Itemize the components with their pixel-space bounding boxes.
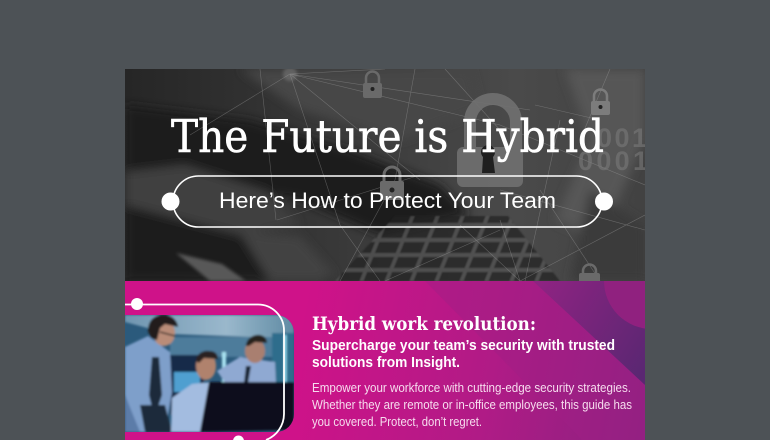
panel subheading <box>312 338 615 371</box>
corner circle <box>604 281 645 328</box>
icon: large padlock <box>457 99 523 187</box>
panel subheading: Supercharge your team’s security with trusted <box>312 338 615 354</box>
icon: padlock top <box>363 72 382 98</box>
panel body text <box>312 381 632 429</box>
panel subheading: solutions from Insight. <box>312 355 460 371</box>
panel: hybrid work revolution <box>125 281 645 440</box>
diagonal band <box>425 281 645 440</box>
ceiling <box>125 315 294 338</box>
right man <box>217 357 276 384</box>
keyboard keys <box>335 216 560 281</box>
network lines <box>190 69 645 281</box>
subtitle pill <box>162 176 613 227</box>
title: The Future is Hybrid <box>171 110 604 163</box>
panel body text: you covered. Protect, don’t regret. <box>312 415 482 429</box>
dark diagonal band <box>533 281 645 385</box>
team photo <box>125 315 295 433</box>
icon: padlock centre <box>380 167 404 200</box>
bottom line dot <box>233 436 244 440</box>
hands and laptop photo <box>125 69 645 281</box>
hero photo panel <box>125 67 648 285</box>
icon: padlock bottom <box>579 263 600 281</box>
panel body text: Empower your workforce with cutting-edge security strategies. <box>312 381 631 395</box>
connector line <box>125 304 284 440</box>
back wall <box>170 337 275 357</box>
monitor <box>200 382 294 432</box>
middle man <box>171 382 212 432</box>
top line dot <box>131 298 143 310</box>
icon: padlock right <box>591 90 610 115</box>
left pill dot <box>162 192 180 210</box>
background gradient <box>300 281 645 440</box>
left man <box>125 336 172 432</box>
binary digits <box>579 128 645 170</box>
subtitle text: Here’s How to Protect Your Team <box>219 188 556 213</box>
right pill dot <box>595 192 613 210</box>
binary digits: 001 <box>597 123 647 153</box>
panel body text: Whether they are remote or in-office employees, this guide has <box>312 398 632 412</box>
panel heading: Hybrid work revolution: <box>312 314 536 335</box>
text block <box>312 314 632 429</box>
binary digits: 0001 <box>578 146 648 176</box>
